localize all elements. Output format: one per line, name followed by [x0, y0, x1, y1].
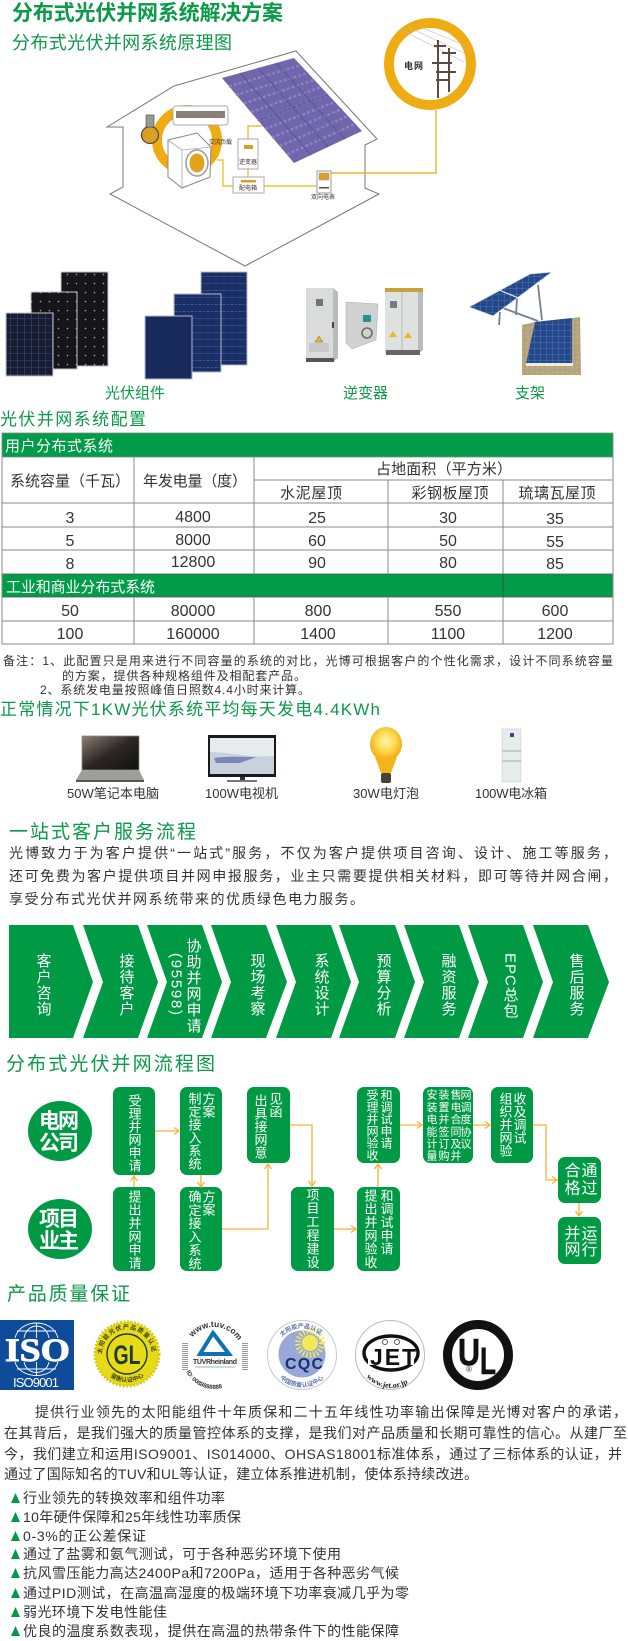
appliance: light bulb [370, 727, 402, 783]
service process chevrons [9, 925, 609, 1038]
quality statement [4, 1404, 627, 1482]
wall box [346, 302, 378, 349]
column headers: 年发电量（度） [143, 473, 247, 490]
box: meters and contract: 装置并签订购 [437, 1089, 450, 1162]
step 8 [468, 925, 543, 1038]
box: accept application: 受理并网申请 [126, 1094, 142, 1172]
table header band: residential [2, 433, 613, 457]
subtitle: 分布式光伏并网系统原理图 [12, 33, 232, 53]
product: mounting racks [469, 272, 581, 375]
logo: CQC: 太阳能产品认证 [280, 1322, 323, 1337]
table rows: 55 [546, 534, 564, 551]
table rows: 550 [435, 603, 461, 620]
box: meters and contract: 售电合同及并 [449, 1088, 462, 1162]
quality bullet list [11, 1490, 409, 1639]
table rows [57, 509, 573, 643]
heading: system configuration: 光伏并网系统配置 [0, 410, 146, 429]
table rows: 100 [57, 626, 83, 643]
logo: TUV: TÜVRheinland [193, 1357, 237, 1366]
step 8: EPC总包 [502, 953, 518, 1019]
logo: golden sun certification: 鉴衡认证中心 [110, 1372, 144, 1383]
quality bullet list: 行业领先的转换效率和组件功率 [23, 1490, 225, 1506]
actor: project owner: 项目 [39, 1208, 79, 1231]
box: submit acceptance request [357, 1187, 400, 1271]
box: grid operation: 运行 [578, 1225, 598, 1258]
box: issue opinion: 出具接网意 [252, 1094, 268, 1159]
step 2 [83, 925, 158, 1038]
step 2: 接待客户 [118, 953, 134, 1017]
table rows: 5 [66, 533, 75, 550]
column headers: 琉璃瓦屋顶 [518, 485, 596, 502]
product: inverters [306, 288, 423, 362]
air conditioner [173, 106, 228, 125]
table rows: 60 [308, 533, 326, 550]
house outline [107, 51, 379, 266]
step 3 [147, 925, 222, 1038]
box: submit application [113, 1187, 155, 1271]
table notes: 备注：1、此配置只是用来进行不同容量的系统的对比，光博可根据客户的个性化需求，设计不同系统容量 [3, 653, 613, 668]
actor: project owner: 业主 [39, 1230, 79, 1253]
box: confirm plan [180, 1187, 222, 1271]
table rows: 1100 [431, 626, 465, 643]
table rows: 25 [308, 510, 326, 527]
quality bullet list: 弱光环境下发电性能佳 [23, 1604, 167, 1620]
quality statement: 在其背后，是我们强大的质量管控体系的支撑，是我们对产品质量和长期可靠性的信心。从建厂至 [4, 1425, 627, 1441]
logo: UL [448, 1324, 508, 1386]
box: issue opinion: 见函 [268, 1092, 282, 1118]
quality bullet list: 优良的温度系数表现，提供在高温的热带条件下的性能保障 [23, 1623, 399, 1639]
heading: daily output: 正常情况下1KW光伏系统平均每天发电4.4KWh [0, 700, 380, 719]
table rows: 80 [439, 555, 457, 572]
table rows: 8 [66, 556, 75, 573]
step 3: 协助并网申请 [184, 938, 202, 1034]
appliance labels: 100W电冰箱 [475, 786, 547, 801]
appliance labels: 50W笔记本电脑 [67, 786, 159, 801]
table rows: 1200 [537, 626, 573, 643]
step 1 [9, 925, 93, 1038]
box: passed [558, 1157, 601, 1203]
quality bullet list: 0-3%的正公差保证 [23, 1528, 146, 1544]
step 6: 预算分析 [374, 953, 392, 1017]
box: meters and contract: 安装电能计量 [425, 1088, 438, 1162]
service description [9, 845, 617, 907]
cabinet one [306, 288, 338, 362]
logo: ISO: ISO [5, 1333, 70, 1369]
column headers [10, 461, 596, 502]
step 3: (95598) [168, 953, 184, 1015]
box: organise acceptance: 收及调试 [512, 1092, 526, 1144]
box: passed: 通过 [578, 1162, 598, 1197]
actor: project owner [28, 1199, 92, 1259]
flow arrows [134, 1125, 579, 1229]
inverter: 逆变器 [239, 158, 257, 166]
appliance labels: 100W电视机 [205, 786, 278, 801]
step 7: 融资服务 [440, 953, 456, 1017]
quality statement: 通过了国际知名的TUV和UL等认证，建立体系推进机制，使体系持续改进。 [4, 1466, 478, 1482]
box: confirm plan: 确定接入系统 [186, 1190, 202, 1271]
logo: golden sun certification [94, 1320, 160, 1388]
appliance labels: 30W电灯泡 [353, 786, 419, 801]
box: issue opinion [247, 1087, 290, 1163]
heading: one-stop service: 一站式客户服务流程 [9, 821, 196, 843]
logo: golden sun certification: GL [114, 1340, 140, 1370]
box: accept acceptance request [357, 1087, 400, 1163]
box: submit acceptance request: 和调试申请 [378, 1189, 394, 1256]
grid circle with pole: 电网 [404, 60, 423, 71]
appliance labels [67, 786, 547, 801]
table rows: 600 [542, 603, 568, 620]
step 5: 系统设计 [312, 953, 330, 1017]
step 9: 售后服务 [568, 953, 584, 1017]
table rows: 35 [546, 511, 564, 528]
column headers: 彩钢板屋顶 [412, 484, 488, 502]
label: pv modules: 光伏组件 [105, 385, 165, 402]
box: grid operation: 并网 [562, 1225, 580, 1258]
step 4: 现场考察 [248, 953, 266, 1017]
label: rack: 支架 [515, 385, 545, 402]
table header band: residential: 用户分布式系统 [5, 438, 113, 455]
product: monocrystalline panels [6, 272, 108, 376]
cabinet two [385, 288, 423, 355]
appliance: fridge [502, 729, 521, 782]
title: 分布式光伏并网系统解决方案 [12, 1, 283, 25]
table rows: 1400 [300, 626, 336, 643]
step 4 [211, 925, 287, 1038]
box: organise acceptance: 组织并网验 [498, 1092, 512, 1157]
table rows: 90 [308, 555, 326, 572]
service description: 还可免费为客户提供项目并网申报服务，业主只需要提供相关材料，即可等待并网合闸， [9, 868, 617, 884]
table band: commercial [2, 574, 613, 597]
quality statement: 今，我们建立和运用ISO9001、IS014000、OHSAS18001标准体系，通过了三标体系的认证，并 [4, 1446, 622, 1462]
bidirectional meter [311, 171, 335, 201]
logo: JET: www.jet.or.jp [367, 1374, 408, 1389]
logo: JET: JET [370, 1344, 416, 1370]
service description: 光博致力于为客户提供“一站式”服务，不仅为客户提供项目咨询、设计、施工等服务， [9, 845, 617, 861]
appliance: television [208, 735, 276, 782]
box: accept application [113, 1087, 155, 1175]
box: grid operation [558, 1217, 601, 1264]
roof photo [522, 317, 581, 375]
load label: 交流负载 [209, 138, 232, 146]
table rows: 85 [546, 556, 564, 573]
logo: TUV [182, 1322, 248, 1389]
grid circle with pole [389, 23, 471, 105]
distribution box [233, 177, 264, 193]
heading: grid connection flow: 分布式光伏并网流程图 [6, 1053, 215, 1075]
logo: CQC [267, 1320, 337, 1390]
box: confirm plan: 方案 [200, 1189, 216, 1216]
logo: ISO [0, 1320, 74, 1390]
step 6 [339, 925, 415, 1038]
actor: grid company: 电网 [39, 1110, 79, 1133]
service description: 享受分布式光伏并网系统带来的优质绿色电力服务。 [9, 891, 364, 907]
inverter [238, 139, 258, 169]
column headers: 占地面积（平方米） [376, 461, 512, 478]
quality bullet list: 通过了盐雾和氨气测试，可于各种恶劣环境下使用 [23, 1546, 341, 1562]
box: submit acceptance request: 提出并网验收 [362, 1188, 378, 1269]
product: polycrystalline panels [145, 272, 247, 379]
table rows: 80000 [171, 603, 215, 620]
box: organise acceptance [491, 1087, 533, 1163]
diagram: house system schematic [107, 23, 471, 266]
box: construction: 项目工程建设 [304, 1188, 320, 1269]
logo: CQC: CQC [285, 1356, 323, 1373]
table rows: 50 [439, 533, 457, 550]
light bulb [142, 115, 158, 144]
table rows: 8000 [175, 532, 211, 549]
label: inverter: 逆变器 [343, 385, 388, 402]
actor: grid company: 公司 [39, 1132, 79, 1155]
table notes: 2、系统发电量按照峰值日照数4.4小时来计算。 [40, 682, 310, 697]
logo: UL: U [458, 1332, 480, 1374]
logo: JET [355, 1320, 425, 1390]
logo: TUV: www.tuv.com [189, 1322, 241, 1340]
step 1: 客户咨询 [34, 953, 52, 1017]
washing machine [168, 133, 211, 188]
step 7 [404, 925, 479, 1038]
heading: product quality: 产品质量保证 [7, 1283, 130, 1305]
bidirectional meter: 双向电表 [311, 193, 335, 201]
quality bullet list: 通过PID测试，在高温高湿度的极端环境下功率衰减几乎为零 [23, 1585, 409, 1601]
box: submit application: 提出并网申请 [126, 1189, 142, 1270]
load ring [157, 110, 217, 170]
column headers: 系统容量（千瓦） [10, 473, 130, 490]
appliance: laptop [76, 736, 144, 782]
box: accept acceptance request: 和调试申请 [379, 1089, 393, 1150]
table rows: 160000 [166, 626, 220, 643]
box: draft plan: 方案 [200, 1091, 216, 1118]
table band: commercial: 工业和商业分布式系统 [6, 579, 155, 596]
quality bullet list: 10年硬件保障和25年线性功率质保 [23, 1509, 241, 1525]
tilted rack [469, 272, 552, 325]
configuration table [2, 433, 613, 644]
logo: CQC: 中国质量认证中心 [281, 1376, 324, 1388]
logo: TUV: ID: 0088888888 [186, 1370, 222, 1389]
box: draft plan: 制定接入系统 [186, 1092, 202, 1171]
quality bullet list: 抗风雪压能力高达2400Pa和7200Pa，适用于各种恶劣气候 [23, 1565, 399, 1581]
box: meters and contract [423, 1087, 473, 1163]
logo: UL: ® [466, 1365, 472, 1374]
solar array on roof [222, 58, 362, 163]
logo: UL: L [480, 1341, 496, 1383]
flowchart [28, 1087, 601, 1271]
box: meters and contract: 网调度协议 [459, 1089, 472, 1150]
step 5 [276, 925, 351, 1038]
box: draft plan [180, 1087, 222, 1175]
table notes: 的方案，提供各种规格组件及相配套产品。 [62, 668, 306, 683]
logo: ISO: ISO9001 [13, 1375, 59, 1390]
wires [217, 110, 436, 186]
table notes [3, 653, 613, 697]
logo: golden sun certification: 太阳能光伏产品质量认证 [97, 1324, 157, 1354]
table rows: 12800 [171, 554, 215, 571]
table rows: 30 [439, 510, 457, 527]
box: passed: 合格 [562, 1162, 580, 1197]
box: accept acceptance request: 受理并网验收 [365, 1089, 379, 1162]
step 9 [533, 925, 609, 1038]
distribution box: 配电箱 [239, 184, 257, 192]
table rows: 3 [66, 510, 75, 527]
table rows: 4800 [175, 509, 211, 526]
actor: grid company [28, 1101, 92, 1161]
box: construction [291, 1187, 334, 1271]
table rows: 50 [61, 603, 79, 620]
table rows: 800 [305, 603, 331, 620]
column headers: 水泥屋顶 [280, 485, 342, 502]
quality statement: 提供行业领先的太阳能组件十年质保和二十五年线性功率输出保障是光博对客户的承诺， [35, 1404, 627, 1420]
